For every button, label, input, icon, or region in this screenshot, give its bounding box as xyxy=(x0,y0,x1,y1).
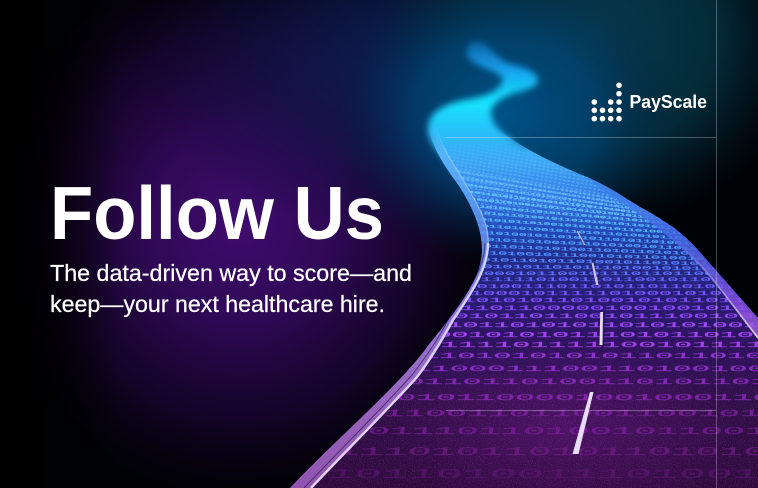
binary digits: 10110101011010010101101011010011010 xyxy=(452,215,699,237)
binary digits: 01010001011001011101101100110 xyxy=(442,271,746,277)
binary digits: 01011010100101101011010010101101011010010110 xyxy=(431,179,661,214)
binary digits: 1010110100101101010110100101101010110 xyxy=(448,202,683,227)
binary digits xyxy=(272,164,758,482)
binary digits: 110101001011010101101011010010 xyxy=(464,229,698,246)
binary digits: 10101111101001101100101101010 xyxy=(437,277,755,283)
binary digits: 101001010110101110100101010010 xyxy=(443,264,741,272)
center dashes xyxy=(572,231,603,454)
logo wordmark: PayScale xyxy=(630,92,707,112)
left kerb dark seam xyxy=(304,243,485,488)
right kerb xyxy=(587,177,758,337)
road grain and haze xyxy=(302,304,758,488)
binary digits: 101011011010100110101101010110 xyxy=(457,243,715,257)
binary digits: 11001011010110100101101010110 xyxy=(453,256,727,267)
binary digits: 010110101101001011010100101101001101 xyxy=(450,208,692,232)
left kerb xyxy=(290,125,489,488)
binary digits: 010110100101110010101101001010 xyxy=(453,250,723,262)
binary digits: 110100101101011010010101101011010010110100 xyxy=(435,186,671,219)
binary digits: 01110100111011010110110101001 xyxy=(431,284,758,290)
subtitle line 2: keep—your next healthcare hire. xyxy=(50,291,385,317)
left white line xyxy=(311,243,488,488)
left white line upper xyxy=(436,127,488,243)
logo: PayScale xyxy=(592,82,707,121)
title: Follow Us xyxy=(50,171,384,255)
guide lines xyxy=(446,0,716,488)
subtitle line 1: The data-driven way to score—and xyxy=(50,260,412,286)
binary digits: 0110100101101011010010110101101001011010110100 xyxy=(430,164,637,204)
binary digits: 011010110100101101010010110101 xyxy=(462,237,706,252)
road dot texture xyxy=(446,146,650,222)
icon: dot bars xyxy=(592,82,622,121)
binary digits: 101101011010010101101001011010110100101101010 xyxy=(431,171,650,209)
right white line xyxy=(676,241,758,338)
binary digits: 01101010110100101011010110100101101001 xyxy=(447,195,674,222)
subtitle xyxy=(50,260,412,317)
road: main surface with binary digits xyxy=(272,118,758,488)
road surface xyxy=(290,118,758,488)
binary digits: 010110101001011010110100101101 xyxy=(467,223,690,241)
road: blurred distant section xyxy=(428,42,538,175)
